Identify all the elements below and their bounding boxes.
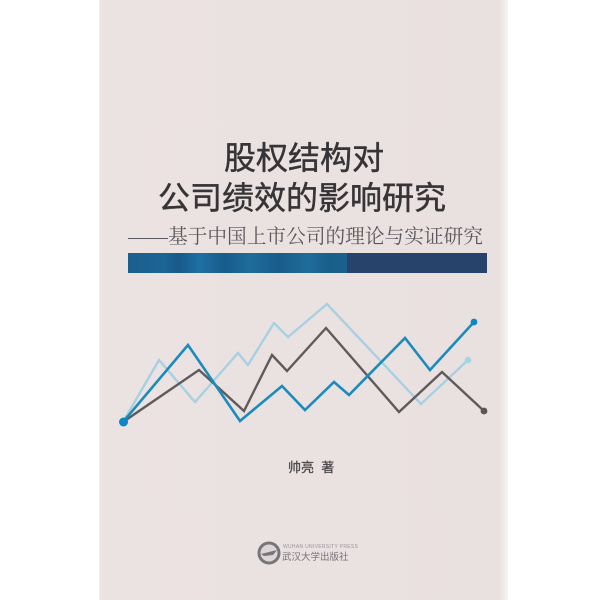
series: blue line: [119, 319, 477, 426]
subtitle: 基于中国上市公司的理论与实证研究: [168, 226, 483, 248]
panel: book cover: [99, 0, 508, 600]
author: 帅亮 著: [288, 460, 334, 475]
publisher logo: [258, 542, 280, 564]
bar: dark segment: [347, 253, 487, 273]
publisher English name: WUHAN UNIVERSITY PRESS: [283, 544, 358, 550]
series: dark grey line: [123, 328, 487, 422]
title line 2: 公司绩效的影响研究: [158, 180, 446, 216]
decorative colour bar: [128, 253, 487, 273]
publisher Chinese name: 武汉大学出版社: [282, 552, 349, 563]
title line 1: 股权结构对: [224, 140, 384, 176]
series: light blue line: [123, 304, 471, 422]
